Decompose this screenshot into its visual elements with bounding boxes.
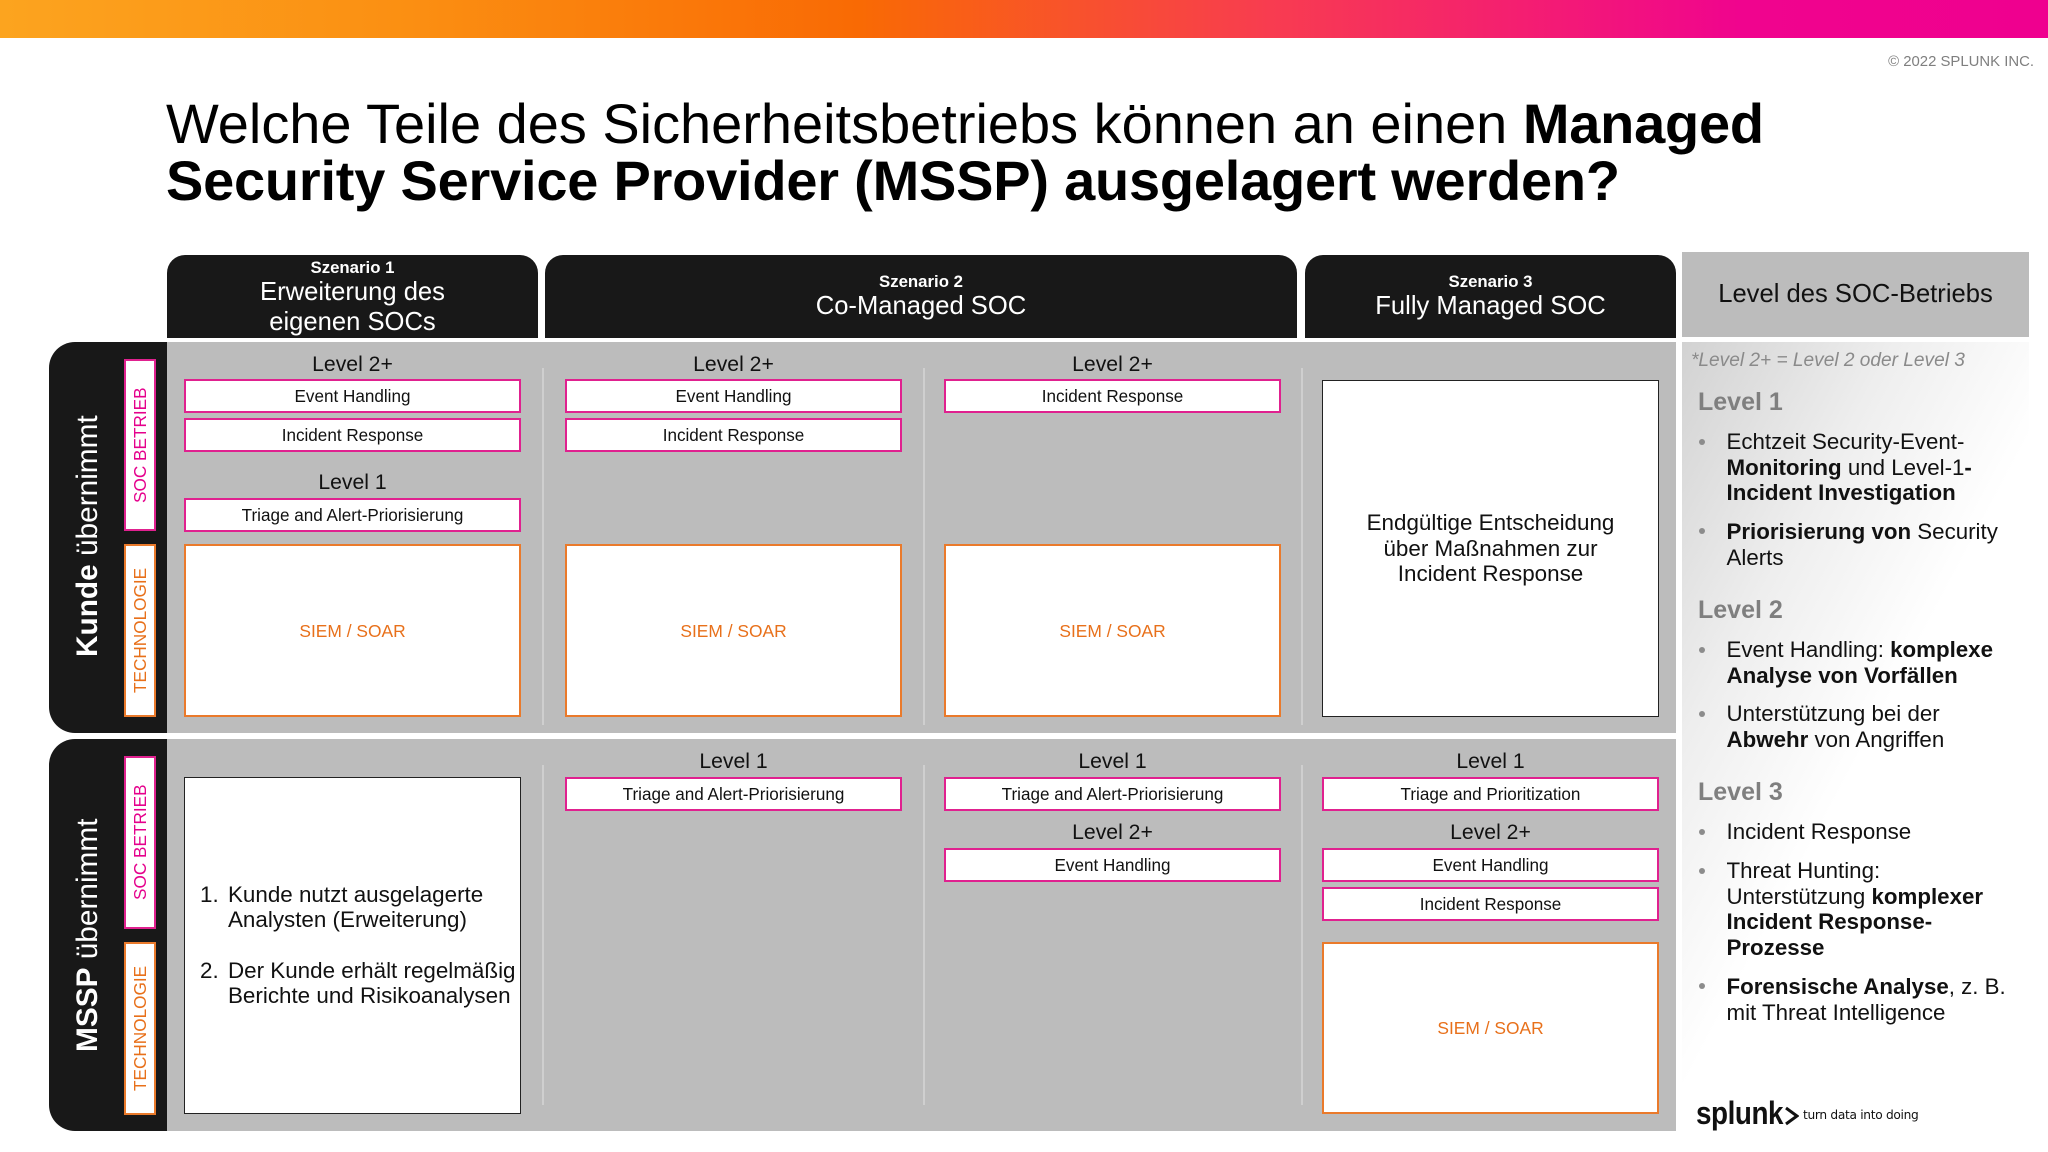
note: level 2+ definition: *Level 2+ = Level 2 oder Level 3 bbox=[1691, 350, 1965, 371]
box: final decision on incident response: Incident Response bbox=[1398, 561, 1583, 586]
header: Szenario 2: Co-Managed SOC bbox=[816, 292, 1026, 320]
bullet dot bbox=[1699, 868, 1705, 874]
box: Event Handling: Event Handling bbox=[295, 387, 410, 406]
box: Triage bbox=[184, 498, 521, 532]
bullet text: Echtzeit: Monitoring und Level-1- bbox=[1726, 455, 1972, 480]
logo word: splunk bbox=[1696, 1095, 1783, 1131]
bullet text: Event Handling: Analyse von Vorfällen bbox=[1726, 663, 1958, 688]
panel: level descriptions bbox=[1682, 342, 2029, 1131]
header: Szenario 1: eigenen SOCs bbox=[269, 308, 436, 336]
box: Incident Response: Incident Response bbox=[282, 426, 423, 445]
tag: Technologie MSSP bbox=[124, 942, 156, 1115]
list item 2 bbox=[200, 958, 516, 1008]
box: Triage: Triage and Alert-Priorisierung bbox=[242, 506, 463, 525]
bullet text: Echtzeit bbox=[1726, 429, 1972, 505]
panel: MSSP übernimmt side label bbox=[49, 739, 167, 1131]
bullet dot bbox=[1699, 711, 1705, 717]
bullet text: Event Handling bbox=[1726, 637, 1993, 688]
Kunde, column 2: level 2+ label: Level 2+ bbox=[693, 353, 774, 376]
box: Incident Response bbox=[565, 418, 902, 452]
top gradient bar bbox=[0, 0, 2048, 38]
MSSP, column 4: level 2+ label: Level 2+ bbox=[1450, 821, 1531, 844]
title: Welche Teile des Sicherheitsbetriebs können an einen Managed bbox=[166, 92, 1764, 155]
box: Event Handling bbox=[944, 848, 1281, 882]
header: Level des SOC-Betriebs: Level des SOC-Betriebs bbox=[1718, 280, 1993, 308]
bullet text: Threat Hunting bbox=[1726, 858, 1983, 960]
bullet text: Unterstützung bbox=[1726, 701, 1944, 752]
box: SIEM / SOAR column 1 bbox=[184, 544, 521, 717]
panel: Kunde row background bbox=[166, 342, 1676, 733]
box: final decision on incident response: über Maßnahmen zur bbox=[1383, 536, 1598, 561]
bullet dot bbox=[1699, 439, 1705, 445]
list item 2: Berichte und Risikoanalysen bbox=[228, 983, 511, 1008]
tag: Technologie Kunde bbox=[124, 544, 156, 717]
bullet text: Forensische Analyse: Forensische Analyse, z. B. bbox=[1726, 974, 2006, 999]
label: Kunde übernimmt: Kunde übernimmt bbox=[71, 415, 104, 657]
bullet text: Event Handling: Event Handling: komplexe bbox=[1726, 637, 1993, 662]
bullet text: Priorisierung: Alerts bbox=[1726, 545, 1784, 570]
bullet text: Threat Hunting: Incident Response- bbox=[1726, 909, 1932, 934]
bullet text: Forensische Analyse: mit Threat Intelligence bbox=[1726, 1000, 1945, 1025]
list item 2: Der Kunde erhält regelmäßig bbox=[228, 958, 516, 982]
box: SIEM / SOAR column 1: SIEM / SOAR bbox=[299, 621, 406, 641]
bullet dot bbox=[1699, 983, 1705, 989]
tag: SOC Betrieb Kunde: SOC BETRIEB bbox=[130, 387, 150, 503]
list item 1 bbox=[200, 882, 483, 932]
box: Triage and Prioritization: Triage and Prioritization bbox=[1401, 785, 1580, 804]
logo chevron bbox=[1785, 1106, 1799, 1126]
title bbox=[166, 92, 1764, 212]
header: Szenario 3: Szenario 3 bbox=[1449, 272, 1532, 291]
box: final decision on incident response: Endgültige Entscheidung bbox=[1367, 510, 1614, 535]
tagline: turn data into doing bbox=[1803, 1108, 1918, 1122]
heading: Level 1: Level 1 bbox=[1698, 388, 1783, 416]
box: SIEM / SOAR column 4: SIEM / SOAR bbox=[1437, 1018, 1544, 1038]
Kunde, column 1: level 2+ label: Level 2+ bbox=[312, 353, 393, 376]
panel: MSSP row background bbox=[166, 739, 1676, 1131]
list item 2: 2. bbox=[200, 958, 219, 982]
panel: Kunde übernimmt side label bbox=[49, 342, 167, 733]
box: SIEM / SOAR column 3: SIEM / SOAR bbox=[1059, 621, 1166, 641]
MSSP, column 2: level 1 label: Level 1 bbox=[699, 750, 768, 773]
Kunde, column 3: level 2+ label: Level 2+ bbox=[1072, 353, 1153, 376]
tag: SOC Betrieb Kunde bbox=[124, 359, 156, 531]
box: Incident Response bbox=[1322, 887, 1659, 921]
bullet dot bbox=[1699, 829, 1705, 835]
tag: SOC Betrieb MSSP bbox=[124, 756, 156, 929]
header: Szenario 2: Szenario 2 bbox=[879, 272, 963, 291]
box: MSSP column 1 numbered list bbox=[184, 777, 521, 1114]
MSSP, column 4: level 1 label: Level 1 bbox=[1456, 750, 1525, 773]
heading: Level 2: Level 2 bbox=[1698, 596, 1783, 624]
box: Triage: Triage and Alert-Priorisierung bbox=[623, 785, 844, 804]
header: Level des SOC-Betriebs bbox=[1682, 252, 2029, 337]
bullet text: Echtzeit: Incident Investigation bbox=[1726, 480, 1956, 505]
copyright note: © 2022 SPLUNK INC. bbox=[1888, 54, 2034, 70]
bullet text: Echtzeit: Echtzeit Security-Event- bbox=[1726, 429, 1964, 454]
box: Event Handling bbox=[565, 379, 902, 413]
label: MSSP übernimmt: MSSP übernimmt bbox=[71, 818, 104, 1052]
header: Szenario 1: Erweiterung des bbox=[260, 278, 445, 306]
box: Event Handling bbox=[184, 379, 521, 413]
box: Triage: Triage and Alert-Priorisierung bbox=[1002, 785, 1223, 804]
header: Szenario 1: Szenario 1 bbox=[311, 258, 394, 277]
box: Triage and Prioritization bbox=[1322, 777, 1659, 811]
box: Triage bbox=[565, 777, 902, 811]
box: SIEM / SOAR column 3 bbox=[944, 544, 1281, 717]
bullet dot bbox=[1699, 528, 1705, 534]
header: Szenario 1 bbox=[167, 255, 538, 338]
box: Event Handling: Event Handling bbox=[1433, 856, 1548, 875]
bullet text: Incident Response: Incident Response bbox=[1726, 819, 1911, 844]
box: Event Handling: Event Handling bbox=[676, 387, 791, 406]
header: Szenario 3: Fully Managed SOC bbox=[1375, 292, 1606, 320]
box: SIEM / SOAR column 2 bbox=[565, 544, 902, 717]
bullet text: Threat Hunting: Unterstützung komplexer bbox=[1726, 884, 1983, 909]
heading: Level 3: Level 3 bbox=[1698, 778, 1783, 806]
box: SIEM / SOAR column 4 bbox=[1322, 942, 1659, 1114]
box: Incident Response bbox=[184, 418, 521, 452]
tag: Technologie MSSP: TECHNOLOGIE bbox=[130, 966, 150, 1091]
box: Event Handling: Event Handling bbox=[1055, 856, 1170, 875]
MSSP, column 3: level 1 label: Level 1 bbox=[1078, 750, 1147, 773]
Kunde, column 1: level 1 label: Level 1 bbox=[318, 471, 387, 494]
MSSP, column 3: level 2+ label: Level 2+ bbox=[1072, 821, 1153, 844]
bullet text: Threat Hunting: Threat Hunting: bbox=[1726, 858, 1880, 883]
bullet text: Forensische Analyse bbox=[1726, 974, 2006, 1025]
bullet text: Unterstützung: Unterstützung bei der bbox=[1726, 701, 1940, 726]
box: Triage bbox=[944, 777, 1281, 811]
list item 1: Analysten (Erweiterung) bbox=[228, 907, 467, 932]
box: Event Handling bbox=[1322, 848, 1659, 882]
list item 1: Kunde nutzt ausgelagerte bbox=[228, 882, 483, 906]
bullet dot bbox=[1699, 647, 1705, 653]
title: Security Service Provider (MSSP) ausgelagert werden? bbox=[166, 148, 1620, 212]
logo: splunk bbox=[1696, 1095, 1918, 1131]
box: Incident Response: Incident Response bbox=[663, 426, 804, 445]
tag: SOC Betrieb MSSP: SOC BETRIEB bbox=[130, 785, 150, 900]
tag: Technologie Kunde: TECHNOLOGIE bbox=[130, 568, 150, 693]
bullet text: Priorisierung bbox=[1726, 519, 1998, 570]
bullet text: Priorisierung: Priorisierung von Security bbox=[1726, 519, 1998, 544]
bullet text: Unterstützung: Abwehr von Angriffen bbox=[1726, 727, 1944, 752]
header: Szenario 3 bbox=[1305, 255, 1676, 338]
box: final decision on incident response bbox=[1322, 380, 1659, 717]
box: Incident Response bbox=[944, 379, 1281, 413]
header: Szenario 2 bbox=[545, 255, 1297, 338]
bullet text: Threat Hunting: Prozesse bbox=[1726, 935, 1824, 960]
box: Incident Response: Incident Response bbox=[1042, 387, 1183, 406]
box: SIEM / SOAR column 2: SIEM / SOAR bbox=[680, 621, 787, 641]
box: Incident Response: Incident Response bbox=[1420, 895, 1561, 914]
list item 1: 1. bbox=[200, 882, 219, 906]
